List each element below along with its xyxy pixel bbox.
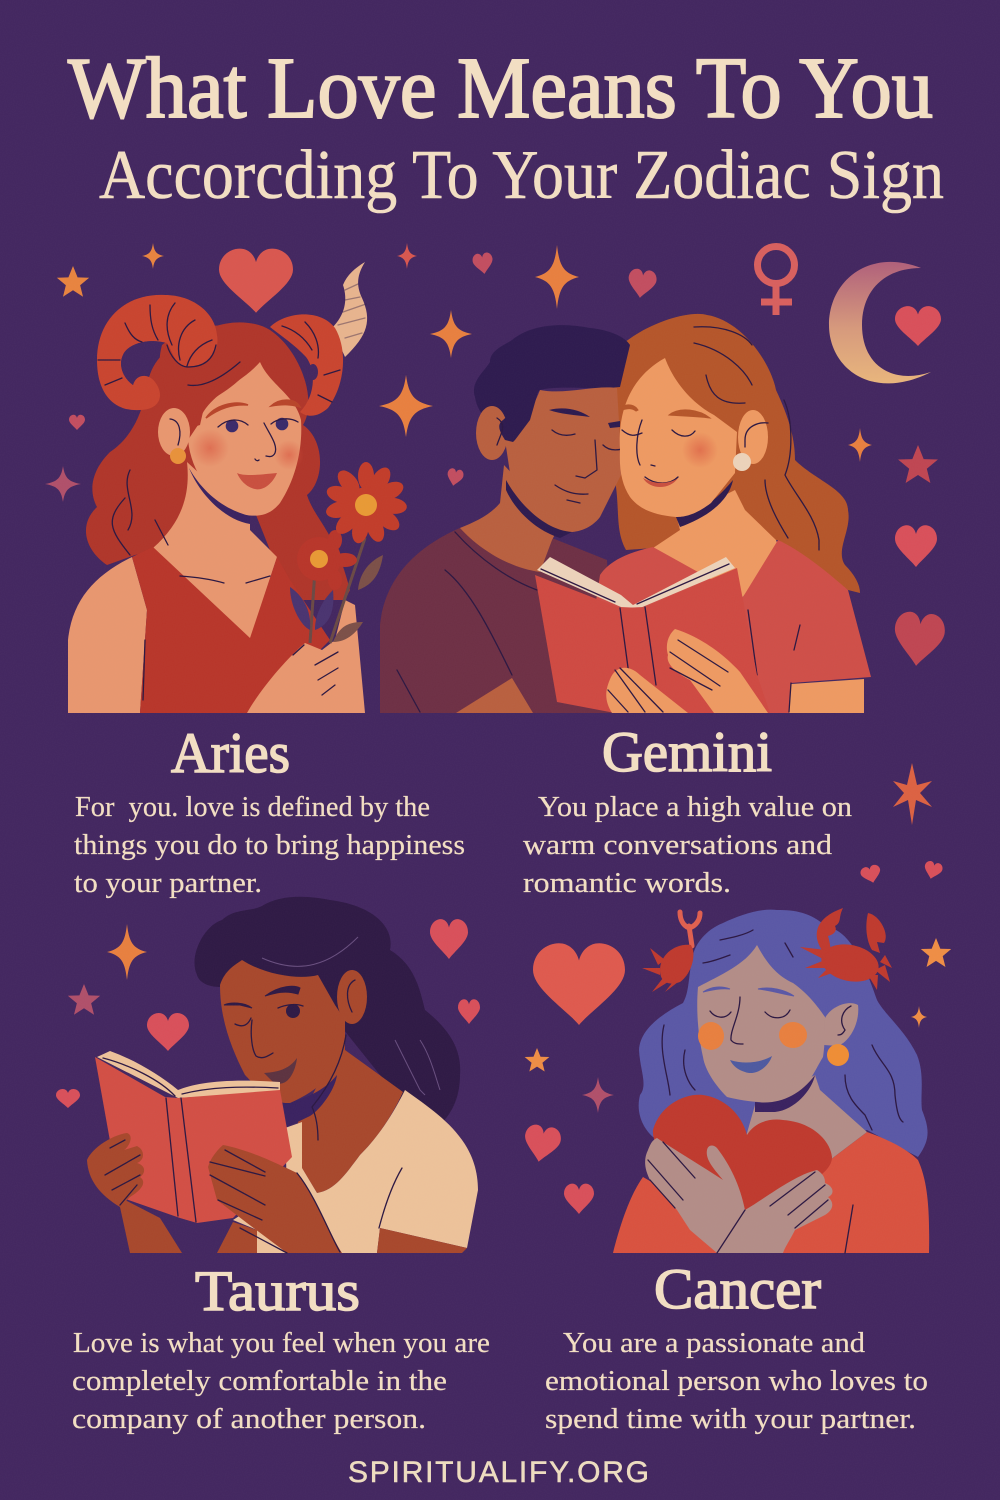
- man hair: [474, 325, 630, 440]
- text: Cancer description: You are a passionate and: [563, 1328, 865, 1359]
- horn cream: [332, 262, 367, 357]
- text: Aries description: For you. love is defined by the: [75, 792, 430, 823]
- woman earring: [733, 453, 751, 471]
- woman mouth: [643, 478, 678, 487]
- flowers: [290, 462, 408, 643]
- ear: [158, 408, 190, 456]
- ear: [824, 1003, 858, 1046]
- man face: [505, 387, 622, 532]
- hand and right arm: [247, 600, 365, 713]
- text: Taurus description: company of another person.: [72, 1404, 426, 1435]
- man neck: [460, 465, 560, 572]
- woman cheek: [682, 432, 718, 468]
- man arm: [456, 678, 533, 713]
- man ear: [476, 406, 508, 460]
- subtitle: Accorcding To Your Zodiac Sign: [99, 137, 944, 214]
- woman back hair: [612, 314, 860, 593]
- text: Taurus description: [72, 1328, 490, 1435]
- eyebrows: [224, 986, 300, 1008]
- text: Aries description: [74, 792, 465, 899]
- left fingers: [87, 1133, 144, 1207]
- right hand: [667, 629, 768, 713]
- text: Cancer description: emotional person who loves to: [545, 1366, 928, 1397]
- illustration: Cancer woman: [613, 908, 929, 1253]
- left shoulder: [68, 557, 147, 713]
- ear: [337, 970, 367, 1024]
- cheeks: [698, 1022, 724, 1050]
- left lower arm piece: [217, 1222, 257, 1253]
- mouth: [730, 1056, 772, 1073]
- woman neck shadow: [676, 480, 733, 527]
- left crab: [642, 912, 700, 992]
- woman brows: [622, 405, 710, 418]
- neck shadow: [189, 468, 250, 524]
- neck and chest: [298, 1030, 403, 1193]
- earring: [827, 1044, 849, 1066]
- big heart: [653, 1095, 832, 1212]
- text: Aries description: to your partner.: [74, 868, 262, 899]
- illustration: Taurus woman: [87, 897, 478, 1253]
- text: Aries description: things you do to bring happiness: [74, 830, 465, 861]
- text: Taurus description: completely comfortable in the: [72, 1366, 447, 1397]
- heading: Aries: Aries: [171, 722, 290, 785]
- text: Gemini description: [523, 792, 852, 899]
- shirt: [233, 1090, 478, 1253]
- cheeks: [191, 429, 229, 467]
- eyes: [286, 1004, 300, 1018]
- mouth: [264, 1058, 297, 1084]
- text: Gemini description: romantic words.: [523, 868, 731, 899]
- left hand: [606, 668, 688, 713]
- hair lines: [262, 937, 440, 1095]
- right forearm: [377, 1228, 467, 1253]
- chest: [153, 462, 277, 640]
- eyebrows: [206, 400, 300, 418]
- man neck shadow: [506, 480, 572, 538]
- man brows: [549, 408, 620, 428]
- text: Cancer description: [545, 1328, 928, 1435]
- eyes and nose: [710, 997, 790, 1044]
- hair lock over forehead: [160, 325, 262, 428]
- neck: [745, 1075, 867, 1160]
- earring: [170, 448, 186, 464]
- hair: [639, 910, 928, 1160]
- left horn: [97, 295, 218, 410]
- woman face: [620, 358, 737, 517]
- hair and chest lines: [112, 362, 240, 555]
- face: [188, 362, 301, 516]
- brows: [703, 987, 794, 996]
- dress: [132, 547, 330, 713]
- collarbone lines: [143, 576, 338, 700]
- right crab: [800, 908, 892, 990]
- heading: Gemini: Gemini: [602, 721, 772, 784]
- man shirt: [380, 527, 615, 713]
- right hand: [208, 1145, 342, 1253]
- title: What Love Means To You: [68, 39, 933, 136]
- illustration: Gemini couple: [380, 314, 871, 713]
- mouth: [237, 473, 277, 489]
- neck shadow: [755, 1075, 815, 1112]
- text: Taurus description: Love is what you feel when you are: [73, 1328, 490, 1359]
- icon: crescent moon: [829, 262, 931, 383]
- illustration: Aries woman: [68, 262, 408, 713]
- woman arm: [789, 679, 864, 713]
- book pages: [97, 1051, 280, 1098]
- text: Gemini description: warm conversations and: [523, 830, 832, 861]
- neck shadow: [283, 1075, 337, 1127]
- hair: [195, 897, 460, 1125]
- footer: website: SPIRITUALIFY.ORG: [348, 1456, 649, 1489]
- decorative icons: top: [45, 243, 946, 885]
- hair lines: [662, 930, 903, 1130]
- decorative icons: bottom: [56, 919, 951, 1214]
- man hair front: [499, 385, 540, 442]
- eyes: [226, 420, 238, 432]
- woman ear: [738, 410, 768, 464]
- book cover: [95, 1057, 292, 1223]
- face: [697, 945, 825, 1102]
- text: Cancer description: spend time with your partner.: [545, 1404, 916, 1435]
- heading: Taurus: Taurus: [195, 1260, 360, 1323]
- right horn: [270, 314, 343, 416]
- woman shirt: [590, 540, 871, 713]
- right hand: [717, 1170, 833, 1253]
- face: [220, 960, 345, 1103]
- icon: venus symbol: [758, 246, 794, 315]
- book pages: [537, 557, 735, 608]
- left forearm: [120, 1200, 182, 1253]
- shirt: [613, 1132, 929, 1253]
- left hand: [645, 1138, 745, 1253]
- book cover: [535, 568, 770, 713]
- woman neck and chest: [653, 490, 778, 597]
- back hair: [86, 322, 350, 600]
- text: Gemini description: You place a high value on: [538, 792, 852, 823]
- heading: Cancer: Cancer: [654, 1258, 821, 1321]
